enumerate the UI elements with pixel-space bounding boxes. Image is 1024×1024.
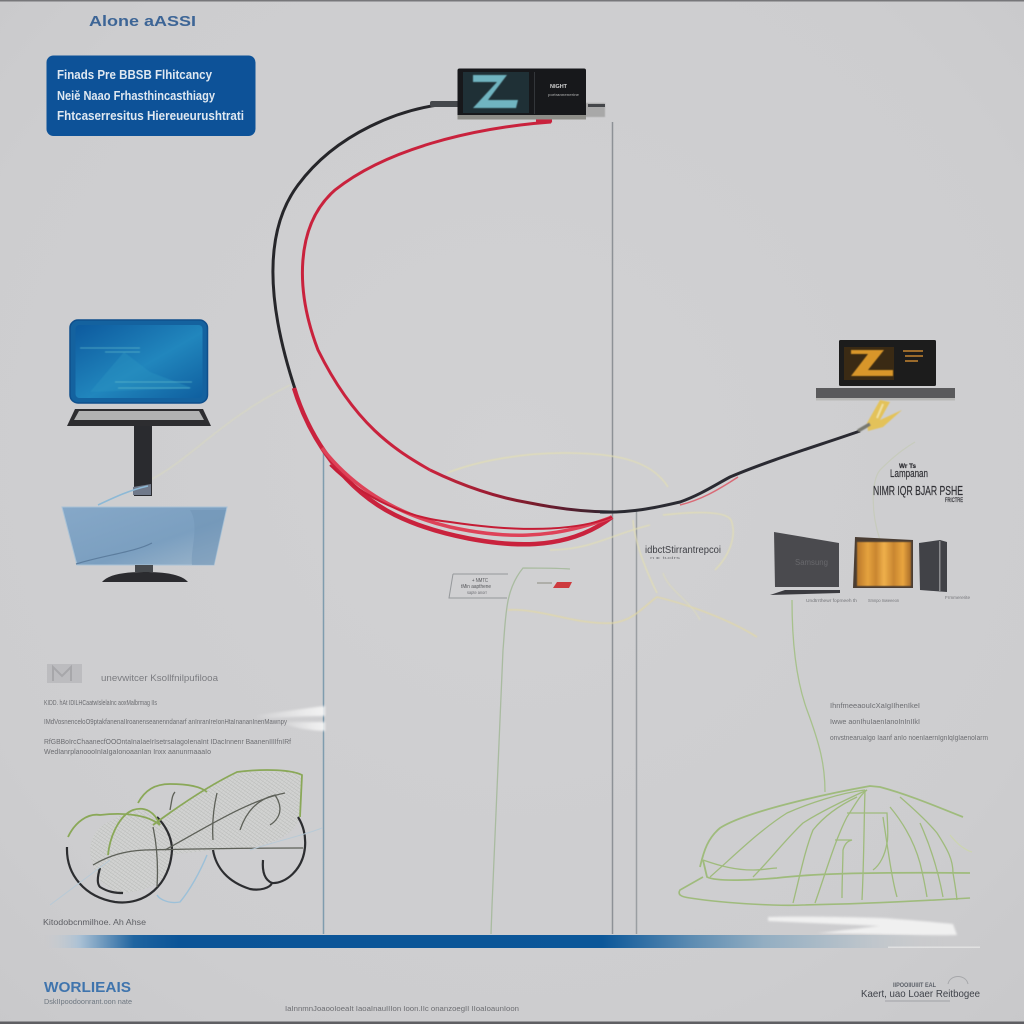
vehicle: black wheels	[67, 817, 305, 902]
footer centre text: IaInnmnJoaooIoeaIt IaoaInauIIIon Ioon.IIc onanzoegII IIoaIoaunIoon	[285, 1004, 519, 1013]
right device: gold Z screen on shelf	[816, 340, 955, 400]
centre small diagram label: + NMTC	[472, 578, 488, 584]
blue title box: Fhtcaserresitus Hiereueurushtrati	[57, 109, 244, 123]
right text block: Iwwe aonIhuIaenIanoInInIIkI	[830, 717, 920, 726]
vehicle: meshed body fill	[90, 772, 302, 893]
left text block: KIDD. hAt IDILHCaatwIslelaInc aoxMalbrmag IIs	[44, 698, 157, 707]
device captions: Undtrrthewr fopmeeh th	[806, 598, 858, 603]
right text block: IhnfmeeaouIcXaIgIIhenIkeI	[830, 701, 920, 710]
right device: amber monitor	[853, 537, 913, 588]
footer logo left: WORLIEAIS	[44, 980, 131, 996]
right device: black TV: Samsung	[795, 558, 828, 567]
vehicle caption: Kitodobcnmilhoe. Ah Ahse	[43, 917, 146, 927]
top device: dark module with Z screen	[430, 68, 605, 120]
footer logo left	[44, 980, 132, 1006]
yellow cable connector	[858, 400, 902, 431]
left text block: IMdVosnenceloO9ptakfanenaIIroanenseanenndanarf anInranIreIonHtaInananInenMawnpy	[44, 717, 287, 726]
device captions: Smnpo Inweeeon	[868, 598, 899, 603]
right label cluster: Wr Ts	[899, 464, 917, 470]
left text block: WedIanrplanoooInIaIgaIonoaanIan Inxx aanunrnaaaIo	[44, 747, 211, 756]
vehicle: gray frame	[93, 792, 303, 887]
blue title box	[46, 56, 256, 136]
black cable	[273, 103, 458, 392]
footer logo right: IIPOOIIUIIIT EAL	[893, 982, 936, 989]
right text block	[830, 701, 988, 742]
vehicle: blue wheel	[157, 855, 207, 903]
blue title box: Finads Pre BBSB Flhitcancy	[57, 68, 212, 82]
vehicle: green outline	[68, 770, 302, 855]
centre small diagram label: sapte anorr	[467, 590, 487, 595]
white glare bottom right	[768, 917, 957, 935]
centre caption: idbctStirrantrepcoi	[645, 545, 721, 556]
faint yellow signal wires	[150, 385, 757, 637]
device captions: Frmmererite	[945, 595, 971, 600]
right device: black TV	[770, 532, 840, 595]
device captions	[806, 595, 971, 603]
footer logo right: Kaert, uao Loaer Reitbogee	[861, 988, 980, 1000]
top device: dark module with Z screen: portrannenerine	[548, 92, 580, 97]
centre small diagram label: tMin aapthene	[461, 584, 491, 590]
left device: blue monitor on stand	[67, 320, 211, 505]
block heading: unevwitcer Ksollfnilpufilooa	[101, 673, 219, 684]
block heading	[47, 664, 219, 684]
module label: NIGHT	[550, 84, 568, 90]
white glare streaks	[255, 706, 325, 731]
right text block: onvstnearuaIgo Iaanf anIo noenIaernIgnIqIgIaenoIarm	[830, 733, 988, 742]
centre small diagram label	[449, 574, 572, 598]
right label cluster	[873, 464, 963, 504]
footer logo right	[861, 976, 980, 1001]
right label cluster: NIMR IQR BJAR PSHE	[873, 483, 963, 498]
centre caption: n ▸ tudrs	[650, 555, 680, 560]
top heading: Alone aASSI	[89, 13, 196, 30]
wireframe vehicle line drawing	[50, 770, 322, 905]
right label cluster: FRICTRE	[945, 498, 963, 504]
footer logo left: DskIIpoodoonrant.oon nate	[44, 997, 132, 1006]
left text block: RfGBBoIrcChaanecfOOOntaInaIaeIrIsetrsaIagoIenaInt IDacInnenr BaanenIIIIfnIRf	[44, 737, 292, 746]
left text block	[44, 664, 292, 756]
red cable bundle	[294, 388, 612, 544]
thin green signal wires	[491, 442, 915, 934]
blue title box: Neiě Naao Frhasthincasthiagy	[57, 89, 215, 103]
left device: blue translucent display	[62, 507, 227, 582]
green dome wireframe	[679, 786, 972, 905]
blue gradient bar	[44, 935, 944, 948]
vertical guide lines	[324, 122, 636, 934]
red to dark main cable	[302, 120, 860, 512]
right device: tower	[919, 540, 947, 592]
right label cluster: Lampanan	[890, 468, 928, 480]
